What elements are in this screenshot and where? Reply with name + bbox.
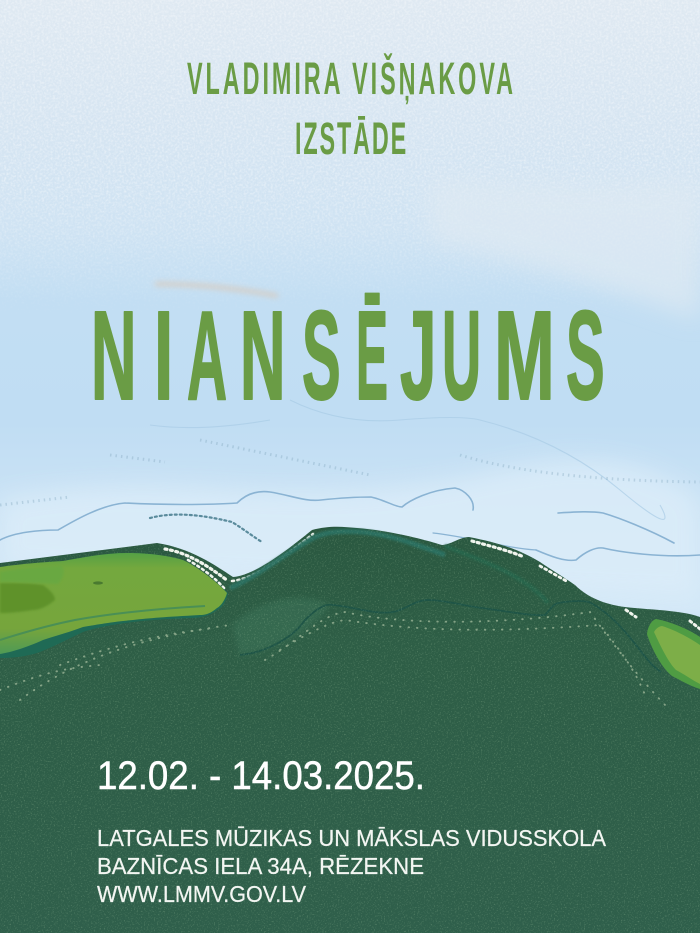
sheen along the paint edge [230, 531, 548, 603]
canvas speckle strips [165, 534, 700, 629]
light green paint stroke right [647, 619, 700, 689]
artist name: VLADIMIRA VIŠŅAKOVA [187, 54, 513, 104]
main title: I [154, 285, 173, 426]
address: BAZNĪCAS IELA 34A, RĒZEKNE [97, 853, 424, 879]
main title [91, 285, 605, 427]
canvas dots in green field [0, 612, 670, 710]
knife ridge line [240, 600, 661, 672]
exhibition label: IZSTĀDE [295, 114, 406, 164]
main title: A [187, 285, 227, 426]
impasto ridges in the white paint [0, 488, 700, 560]
main title: N [91, 286, 136, 427]
venue name: LATGALES MŪZIKAS UN MĀKSLAS VIDUSSKOLA [97, 825, 607, 851]
lighter green smear [232, 598, 330, 656]
main title: S [302, 285, 341, 426]
dark green paint field [0, 527, 700, 933]
venue and contact details [97, 825, 607, 907]
main title: J [400, 286, 436, 427]
main title: U [442, 285, 481, 426]
exhibition dates: 12.02. - 14.03.2025. [97, 754, 425, 798]
main title: S [566, 285, 605, 426]
main title: Ē [356, 287, 388, 427]
canvas grain in lower field [0, 530, 700, 933]
main title: N [240, 286, 285, 427]
painted sky background [0, 0, 700, 640]
website: WWW.LMMV.GOV.LV [97, 881, 307, 907]
main title: M [494, 285, 555, 426]
light green paint stroke left [0, 553, 228, 658]
